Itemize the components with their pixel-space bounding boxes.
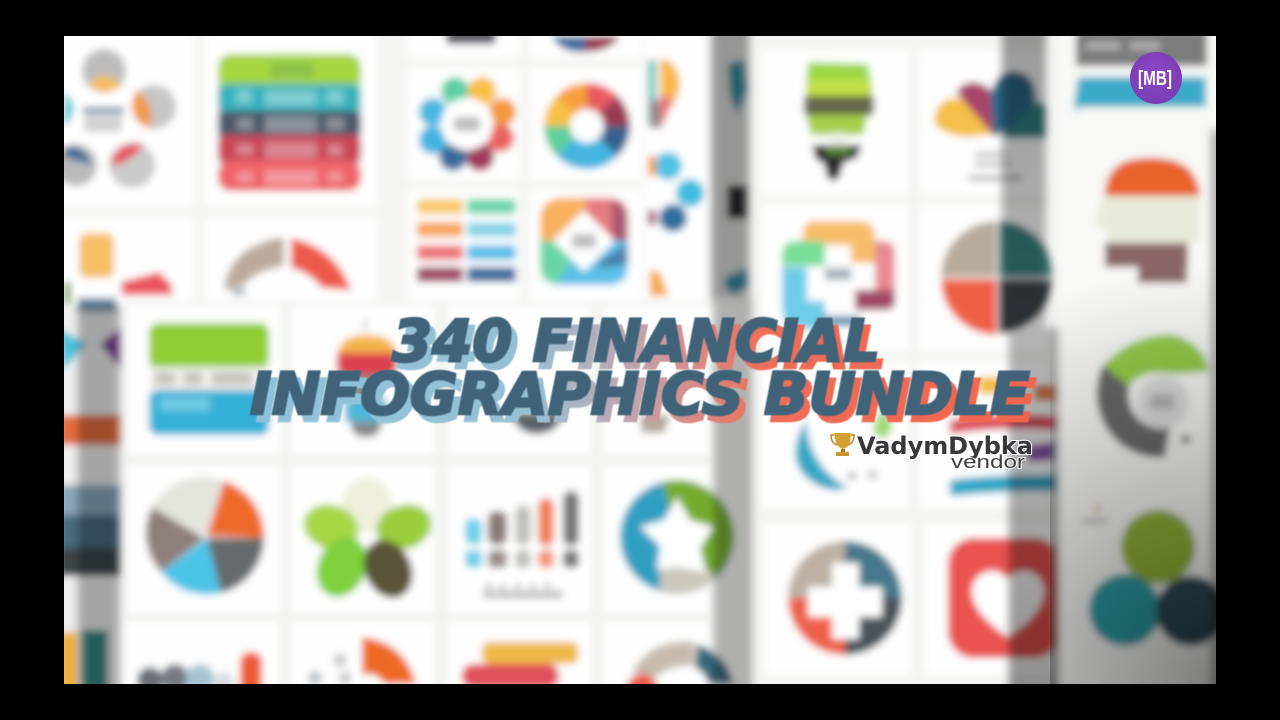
chart: four quadrant circle <box>941 221 1053 335</box>
panel: far right sheet <box>1050 36 1216 650</box>
chart: bottom row fragments <box>132 633 736 684</box>
icon: blue crescent <box>795 408 892 490</box>
icon: circle cycle <box>55 49 176 188</box>
icon: right edge fragments <box>648 58 748 296</box>
panel: right centre sheet <box>765 53 1061 671</box>
icon: peach tag <box>64 233 172 309</box>
far right sheet shading <box>1050 293 1216 684</box>
icon: square ring <box>782 221 895 329</box>
panel: left strip behind front sheet <box>64 294 126 684</box>
title shadow <box>256 314 1036 435</box>
icon: green light bulb <box>804 62 874 180</box>
icon: partial top shapes <box>446 30 620 52</box>
chart: half ring <box>224 237 351 294</box>
logo: MB badge: [MB] <box>1138 68 1172 90</box>
icon: five petal flower <box>298 477 437 606</box>
table: colored rows <box>417 199 516 282</box>
chart: green and gray ring <box>1097 335 1210 457</box>
title shadow: 340 FINANCIAL <box>398 314 886 382</box>
icon: circle with cross <box>788 541 902 655</box>
chart: vertical bars <box>465 491 579 599</box>
vendor label: vendor <box>951 452 1025 472</box>
chart: five part pie <box>146 477 264 595</box>
panel: back left sheet <box>50 20 748 309</box>
panel: front left sheet <box>124 300 734 710</box>
icon: dark centre pieces <box>510 412 670 434</box>
icon: ring with star <box>620 480 734 594</box>
title main text: 340 FINANCIAL <box>392 307 880 375</box>
title main text <box>250 307 1030 428</box>
title: 340 Financial Infographics Bundle <box>250 307 1036 435</box>
chart: stacked colored bars <box>218 54 361 191</box>
icon: three colored heart <box>934 71 1046 181</box>
icon: colored ribbon stack <box>950 377 1056 496</box>
icon: lollipop <box>337 318 397 437</box>
icon: multicolor ring <box>545 84 629 168</box>
vendor badge <box>831 432 1033 472</box>
icon: trophy <box>831 433 854 456</box>
icon: three circle venn <box>1082 505 1226 646</box>
title shadow: INFOGRAPHICS BUNDLE <box>256 367 1036 435</box>
icon: top ribbon <box>1074 30 1207 113</box>
icon: red square with heart <box>948 538 1060 658</box>
icon: flower ring <box>419 77 516 171</box>
icon: head silhouette <box>1096 158 1200 283</box>
vendor name: VadymDybka <box>857 432 1033 460</box>
chart: green and blue block <box>149 323 269 435</box>
logo: MB badge <box>1130 52 1182 104</box>
icon: rounded square with diamond <box>540 198 628 285</box>
title main text: INFOGRAPHICS BUNDLE <box>250 360 1030 428</box>
